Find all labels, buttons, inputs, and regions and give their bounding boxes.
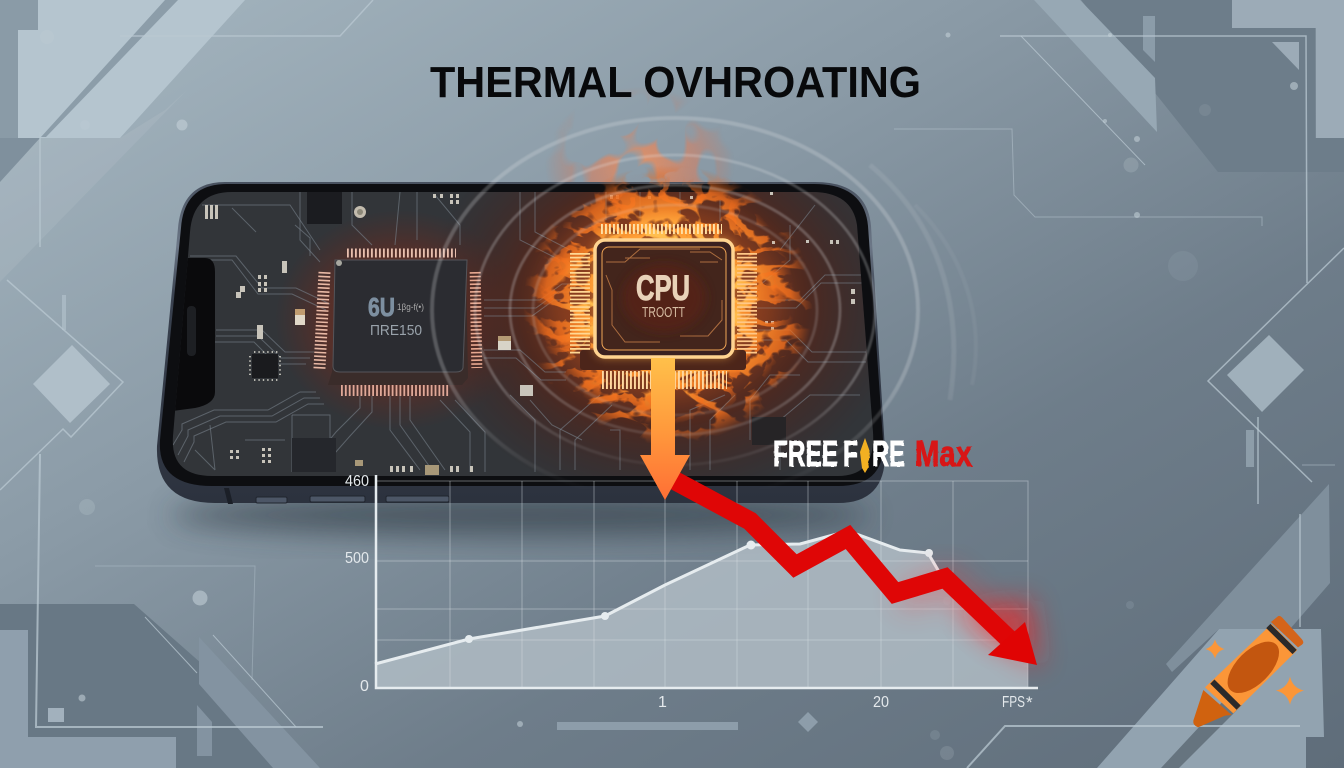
axis labels: FPS <box>1002 694 1025 711</box>
CPU chip <box>580 229 747 380</box>
CPU chip pins <box>580 229 747 380</box>
chart area <box>375 531 1028 688</box>
Free Fire Max logo: FREE <box>773 433 838 474</box>
phone frame <box>157 182 885 503</box>
orange CPU arrow <box>640 358 690 500</box>
axis labels: * <box>1026 693 1033 712</box>
side buttons <box>256 496 449 503</box>
phone <box>156 167 885 504</box>
axis labels: 460 <box>345 473 369 490</box>
chart axes <box>376 475 1038 688</box>
left notch <box>175 258 215 411</box>
heat rings <box>432 118 976 502</box>
axis labels: 20 <box>873 694 889 711</box>
axis labels: 1 <box>658 694 667 711</box>
Free Fire Max logo: Max <box>915 433 972 474</box>
Free Fire Max logo: RE <box>872 433 905 474</box>
left chip pins <box>319 253 477 388</box>
phone bezel <box>160 184 883 486</box>
Free Fire Max logo <box>773 433 972 474</box>
axis labels: 0 <box>360 678 369 695</box>
left chip label: 6U <box>368 292 395 322</box>
red falling arrow <box>670 478 1040 668</box>
FPS chart <box>345 473 1038 712</box>
frame rate line <box>375 527 1010 664</box>
icon: crayon <box>1193 616 1304 727</box>
Free Fire Max logo: F <box>843 433 858 474</box>
circuit traces <box>173 192 866 472</box>
small components <box>205 192 855 475</box>
screen circuit board <box>172 192 874 476</box>
left chip: ΠRE150 <box>370 322 422 339</box>
flames rising above the phone <box>545 87 735 243</box>
left chip: 1βg-f(•) <box>397 302 424 312</box>
fire glow and flames <box>523 165 813 445</box>
left chip <box>319 253 477 388</box>
axis labels: 500 <box>345 550 369 567</box>
throttle label: TROOTT <box>642 305 685 321</box>
title: THERMAL OVHROATING <box>430 58 921 107</box>
phone shadow <box>170 495 870 535</box>
CPU label: CPU <box>636 269 690 308</box>
axis labels <box>345 473 1033 712</box>
